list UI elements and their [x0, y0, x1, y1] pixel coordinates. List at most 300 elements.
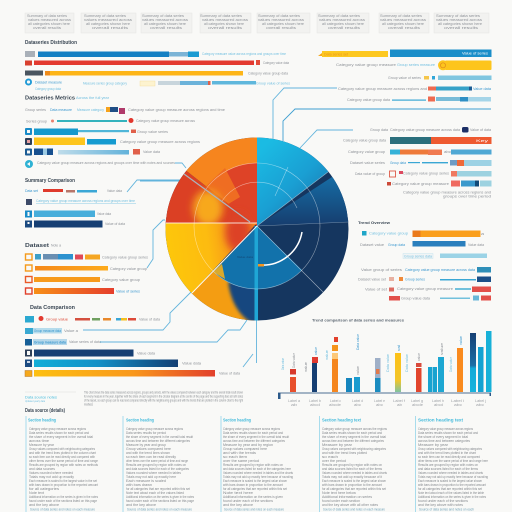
heading: Data Comparison — [30, 305, 75, 311]
upper left orange wedge — [186, 138, 257, 226]
orange cyan bar — [348, 150, 492, 155]
column body — [418, 427, 488, 512]
floating value labels: value — [440, 343, 444, 355]
card 5: Summary of data series — [258, 14, 300, 18]
column heading: Section heading text — [418, 418, 464, 422]
chip row: Category value group series — [102, 256, 148, 260]
card 5: values measured across — [258, 18, 304, 22]
teal bar row: Category value group measure across regions and — [338, 87, 427, 91]
column body: found under each of the sections listed on this page — [126, 499, 194, 503]
column body: found under each section — [322, 499, 360, 503]
column body: Source of data series and notes on each measure — [224, 508, 284, 512]
bar row: cyan bar — [25, 128, 168, 135]
row: Category value group series — [403, 172, 449, 176]
floating value labels: Data value — [292, 353, 296, 368]
floating value labels: value — [356, 366, 360, 375]
panel: column 5 — [415, 416, 488, 512]
row: Category value group measure across data — [405, 268, 475, 272]
column body: with bars drawn in proportion to the amount — [322, 483, 382, 487]
axis labels: Label g — [411, 399, 423, 403]
column body: the share of every segment in the overall total — [322, 435, 386, 439]
column body: Source of data series and notes on each measure — [30, 508, 95, 512]
card 8 — [434, 13, 489, 33]
chip row: Value data — [107, 189, 122, 193]
axis labels: abc — [454, 403, 462, 407]
column body: the share of every segment in the overall total result — [223, 435, 289, 439]
card 4 — [200, 13, 251, 33]
cyan red bar: Group data — [390, 161, 406, 165]
orange sliver — [205, 168, 240, 206]
orange cyan bar: abc — [444, 150, 451, 154]
multi bar — [343, 137, 492, 144]
label text: Across the full year — [76, 96, 110, 100]
column body: for all categories — [29, 487, 60, 491]
axis labels: abcd — [310, 403, 320, 407]
column body: and the key above — [126, 503, 156, 507]
axis labels: ab — [397, 403, 402, 407]
bar row: cyan bar: Group value series — [137, 130, 168, 134]
column body: so each item — [223, 455, 247, 459]
column body: Results are grouped by region with notes on — [126, 463, 186, 467]
left red band — [166, 170, 256, 226]
bottom left orange — [192, 243, 254, 320]
heading: Dataset — [25, 243, 49, 249]
column body: and data sources listed for each of the categories here — [223, 467, 291, 471]
yellow to red bar — [25, 370, 240, 376]
navy bar: Value data — [137, 352, 155, 356]
column body: Category value group measure across regions — [29, 427, 86, 431]
column body: Totals may not add up exactly because of it — [322, 475, 382, 479]
bar row: yellow: Category value group data — [248, 72, 288, 76]
yellow circle bar: Group series measure — [397, 63, 435, 67]
floating value labels: Data value — [356, 334, 360, 350]
pie chart — [166, 138, 349, 320]
column body: Category value group measure across regions — [223, 427, 280, 431]
column heading: Section heading — [126, 418, 154, 422]
column body: for all categories that are reported within this set — [322, 487, 386, 491]
gradient bar: Value of series — [116, 290, 140, 294]
card 1: Summary of data series — [27, 14, 67, 18]
heading: Summary Comparison — [25, 178, 75, 184]
navy base — [166, 138, 348, 320]
column body: Additional information on the series is given — [223, 495, 283, 499]
card 7: values measured across — [380, 18, 426, 22]
column body: other items over the same period of time and range — [126, 459, 188, 463]
intro paragraph: for every measure in the year, together with the share of each segment in the circular diagram at the centre of the page and the supporting bars at both sides — [84, 394, 243, 398]
column body: other items over the same period of time and range here — [418, 459, 488, 463]
axis labels: abcde — [329, 403, 341, 407]
blue label row: Value series of data — [69, 340, 101, 344]
intro paragraph: of the layout, so each group can be read and compared directly with the neighbouring groups and with the trends that are plotted in the column chart to the right — [84, 398, 243, 402]
column body: and data sources listed for each of the items — [322, 467, 382, 471]
column body: Each measure is scaled to the largest value in the set — [29, 479, 97, 483]
column body: and the key above with all other notes — [322, 503, 378, 507]
column body: for all categories that are reported within this set — [126, 487, 190, 491]
column body: Group values compared with neighbouring categories — [29, 447, 95, 451]
blue triangle — [214, 226, 302, 289]
orange bar: Category value group — [110, 267, 147, 271]
intro paragraph — [84, 390, 243, 406]
column body: and with the trends — [223, 451, 256, 455]
text row with navy chip: Value of data — [470, 128, 491, 132]
note text: Category value group measure across regions and — [403, 190, 491, 194]
panel: lower right bars — [358, 220, 491, 300]
upper left red inner — [226, 163, 257, 226]
column body: and the key above with notes — [418, 503, 463, 507]
bar row: chips: Data measure — [50, 108, 72, 112]
white arc — [259, 232, 302, 265]
card 7: overall results — [388, 26, 420, 30]
panel: footer intro — [25, 390, 243, 414]
column body: over the same period — [223, 459, 259, 463]
panel: lower left bars — [25, 305, 240, 376]
card 3 — [141, 13, 192, 33]
column body: Values rounded where needed in tables and the charts — [223, 471, 293, 475]
floating value labels: val — [397, 345, 401, 351]
column body: Totals may not add up exactly here because of rounding — [418, 475, 488, 479]
card 1: all categories shown here — [28, 22, 70, 26]
yellow to red bar: Value of data — [219, 372, 240, 376]
note text: groups over time period — [443, 194, 491, 198]
row — [361, 267, 491, 272]
column body: Additional information on series — [322, 495, 372, 499]
bar row: chips: Category value group measure across regions and time — [128, 108, 225, 112]
axis labels: abc — [476, 403, 484, 407]
column body: found under each of the sections — [223, 499, 273, 503]
yellow orange blob — [193, 190, 223, 226]
row — [355, 171, 492, 177]
axis labels: abcde — [412, 403, 423, 407]
bottom navy blob — [228, 280, 257, 325]
bar row: yellow bar — [25, 138, 200, 145]
bar row: teal line: Category value group measure across — [136, 119, 195, 123]
column body: Data series results for period — [126, 431, 166, 435]
column heading: Section heading — [223, 418, 251, 422]
chip row: Data set — [25, 189, 38, 193]
column body: Measure by year and by region — [223, 443, 273, 447]
card 6: all categories shown here — [322, 22, 364, 26]
floating value labels: value — [417, 353, 421, 361]
column body: Source of data series and notes on each measure — [323, 508, 385, 512]
cyan to navy bar — [25, 360, 201, 367]
column body: Data series results shown for each period and — [223, 431, 283, 435]
column body: Data series results shown for each period and — [418, 431, 478, 435]
bar row: chips: Group series — [25, 108, 46, 112]
column body: found under each of the sections — [418, 499, 468, 503]
axis labels: abc — [354, 403, 361, 407]
row: Dataset value set — [358, 278, 386, 282]
bar row: icon and light bars: Measure series group category — [83, 82, 127, 86]
column body: Data series results shown for each period and — [322, 431, 382, 435]
column body: Note text here — [223, 491, 253, 495]
upper right lower band — [258, 176, 348, 226]
bar row: round icon and note — [25, 160, 175, 168]
card 8: Summary of data series — [436, 14, 480, 18]
column body: Source of data series and notes on each measure — [127, 508, 192, 512]
teal bar row: Value data — [473, 87, 491, 91]
upper right cyan wedge — [257, 138, 328, 226]
chip row: Group value — [46, 318, 68, 322]
column body: Values rounded where needed — [29, 471, 73, 475]
orange bar row — [362, 230, 484, 237]
cyan red bar — [350, 160, 492, 166]
column body: with bars drawn — [126, 483, 152, 487]
row: Data value of group — [355, 172, 385, 176]
blue bar row: Dataset value — [360, 243, 384, 247]
column heading: Section heading — [28, 418, 56, 422]
column body: across time and between categories — [418, 439, 470, 443]
column body: and data sources listed for each of the categories — [126, 467, 189, 471]
panel: upper left bars — [25, 40, 290, 168]
diagonal spoke — [184, 174, 250, 222]
row — [387, 180, 492, 186]
bar row: icon and light bars: Dataset measure — [35, 80, 63, 84]
text row with navy chip — [370, 127, 491, 132]
orange cyan bar: Category value group — [348, 150, 385, 154]
blue label row — [25, 339, 101, 346]
axis labels: Label i — [451, 399, 464, 403]
heading: Dataseries Metrics — [25, 96, 75, 102]
column body: Totals may not add up exactly here — [126, 475, 176, 479]
rings and spokes — [166, 163, 349, 293]
panel: right mid bars — [343, 127, 492, 198]
card 6 — [317, 13, 369, 33]
column body: for all categories that are reported within this set — [418, 487, 482, 491]
boxed text row: Group series data — [404, 254, 432, 258]
panel: column 2 — [122, 416, 194, 512]
axis — [278, 392, 491, 399]
navy bar — [25, 350, 155, 356]
column body: Note text about each of the values listed in the table — [418, 491, 484, 495]
column body: so each item can be read directly and compared with — [29, 455, 95, 459]
bar row: yellow bar: Category value group measure across regions — [120, 140, 200, 144]
row: Value of set — [365, 288, 387, 292]
column body — [322, 427, 387, 512]
arc tip — [258, 264, 264, 266]
text row: Category value group measure across regions and groups over time — [36, 199, 135, 203]
column body: and with the trend lines plotted — [322, 451, 367, 455]
column body: Each measure is scaled — [126, 479, 166, 483]
blue bar row: Value data — [468, 243, 484, 247]
text row with navy chip: Category value group measure across data — [390, 128, 460, 132]
bar row: icon and light bars — [25, 78, 290, 91]
axis labels: Label h — [432, 399, 444, 403]
column body: Measure by year — [418, 443, 449, 447]
column body: and with the trend lines plotted in the column chart — [29, 451, 96, 455]
column body: Results are grouped by region with notes on — [223, 463, 283, 467]
yellow and blue header bar: Value of series — [462, 50, 488, 56]
axis labels — [288, 399, 486, 407]
column body: Each measure is scaled to the largest value shown — [322, 479, 386, 483]
column body: Note text here below — [322, 491, 357, 495]
axis labels: Label d — [352, 399, 363, 403]
yellow circle bar — [336, 60, 492, 70]
blue bar row — [360, 241, 484, 247]
column body: so each item can be read directly — [126, 455, 176, 459]
column body: with bars drawn in proportion to the reported amount — [29, 483, 98, 487]
floating value labels: value — [459, 336, 463, 345]
card 1: values measured across — [28, 18, 71, 22]
column body: Values rounded where needed in tables and charts — [418, 471, 483, 475]
chip row — [25, 316, 160, 322]
floating value labels: value — [314, 347, 318, 355]
column body: the share of every segment in the overall total — [29, 435, 93, 439]
column body: Totals may not add up exactly — [29, 475, 74, 479]
column body: Measure by year — [29, 443, 55, 447]
card 8: all categories shown here — [438, 22, 482, 26]
column body: across time and between the different categories — [322, 439, 384, 443]
axis labels: Label c — [330, 399, 341, 403]
footer intro label: Data source notes — [25, 396, 57, 400]
card 3: overall results — [150, 26, 182, 30]
card 6: overall results — [328, 26, 360, 30]
cyan to navy bar: Value data — [182, 362, 201, 366]
chip row: Value of data — [139, 318, 160, 322]
card 3: all categories shown here — [144, 22, 186, 26]
bar chart — [278, 318, 492, 407]
row — [365, 286, 491, 292]
light blue bar row — [388, 76, 492, 80]
card 7: all categories shown here — [382, 22, 424, 26]
card 2: Summary of data series — [84, 14, 126, 18]
yellow and blue header bar — [318, 50, 492, 57]
bar row: Value of data — [105, 222, 125, 226]
column body: the share of every segment in the overall total result — [126, 435, 193, 439]
card 7: Summary of data series — [380, 14, 422, 18]
card 7 — [379, 13, 429, 33]
label: Note a — [51, 244, 61, 248]
card 3: Summary of data series — [142, 14, 184, 18]
column body: Category value group measure across regions — [418, 427, 473, 431]
column body: Additional information on the series is given in the notes — [29, 495, 98, 499]
column body: Values rounded where needed in tables — [126, 471, 181, 475]
leader lines — [83, 88, 491, 367]
bar row: teal line — [26, 118, 195, 124]
column body: Totals may not add up exactly here because of rounding — [223, 475, 293, 479]
axis labels: Label f — [393, 399, 405, 403]
multi bar: Key — [476, 138, 488, 143]
bar row: icon and light bars: Category group data — [35, 87, 61, 91]
bar row: teal line: Series group — [26, 120, 47, 124]
red centre blob — [225, 212, 251, 252]
yellow and blue header bar: Data series set — [324, 52, 349, 56]
bar row: red: Category value data — [263, 61, 289, 65]
column body: so each — [322, 455, 338, 459]
cyan label row: Group measure data — [34, 329, 61, 333]
row: Value group of series — [361, 268, 402, 272]
panel: column 3 — [220, 416, 293, 512]
row: Category value group measure — [392, 182, 449, 186]
column body: Values rounded where needed in tables and charts — [322, 471, 387, 475]
axis labels: abc — [376, 403, 383, 407]
column body: Additional information on the series is given in the notes — [418, 495, 486, 499]
column body — [126, 427, 194, 512]
orange bar row: Category value group — [369, 232, 408, 236]
light blue bar row: Group value of series — [388, 76, 421, 80]
footer intro sublabel: Updated yearly data — [25, 400, 46, 403]
column body: Source of data series and notes on each — [419, 508, 474, 512]
card 1 — [25, 13, 74, 33]
column body: Group values compared with neighbouring categories — [322, 447, 386, 451]
heading: Dataseries Distribution — [25, 40, 77, 46]
floating value labels: value — [304, 362, 308, 372]
row: Group value data — [401, 296, 430, 300]
orange bar row: a — [481, 232, 484, 236]
card 6: Summary of data series — [318, 14, 360, 18]
orange bar: Category value group — [102, 278, 140, 282]
bar row: chips — [25, 107, 225, 114]
axis labels: abcd — [434, 403, 443, 407]
panel: upper right bars — [318, 50, 492, 102]
card 1: overall results — [33, 26, 61, 30]
chart title: Trend comparison of data series and measures — [312, 318, 405, 322]
column heading: Section heading text — [322, 418, 362, 422]
floating value labels: value — [325, 350, 329, 360]
column body: and the key above — [29, 503, 59, 507]
column body: and the key above — [223, 503, 253, 507]
bar row: round icon and note: Category value group measure across regions and groups over time with notes and sources — [37, 161, 175, 165]
column body: across time and between the different categories — [223, 439, 285, 443]
column body: Note text — [29, 491, 44, 495]
heading: Trend Overview — [358, 220, 391, 225]
floating value labels: Data value — [405, 354, 409, 372]
column body: Each measure is scaled to the largest value shown — [418, 479, 482, 483]
bar row: chips: Measure category — [77, 108, 104, 112]
note text — [403, 190, 491, 198]
axis labels: Label b — [309, 399, 321, 403]
column body — [29, 427, 98, 512]
cyan red bar: Dataset value series — [350, 161, 385, 165]
multi bar: Category value group data — [343, 138, 386, 142]
card 8: values measured across — [436, 18, 482, 22]
intro paragraph: notes — [84, 402, 93, 406]
axis labels: Label e — [374, 399, 385, 403]
bar row: red — [25, 60, 289, 66]
column body: Group values compared here — [223, 447, 267, 451]
blue label row: Group measure data — [34, 340, 67, 344]
card 2: all categories shown here — [86, 22, 130, 26]
axis labels: Label j — [475, 399, 486, 403]
intro paragraph: This chart shows the data series measured across regions, groups and periods, with the values compared between each category and the overall total result shown — [84, 390, 243, 394]
vertical cyan band — [254, 226, 258, 326]
chip row — [25, 189, 122, 193]
floating value labels: Data value — [281, 358, 285, 370]
column body: Category value group measure across regions — [126, 427, 183, 431]
blue bar row: Group data — [388, 243, 405, 247]
blue bar row — [347, 96, 491, 102]
floating value labels: Data value — [386, 354, 390, 372]
column body: across time — [29, 439, 49, 443]
bars — [290, 331, 492, 392]
column body: Results are grouped by region with notes on — [322, 463, 382, 467]
column body: with bars drawn in proportion to the amount — [223, 483, 283, 487]
panel: top summary cards — [25, 13, 489, 33]
column body: across time and between the different categories — [126, 439, 190, 443]
pie small label: Value data — [237, 255, 253, 259]
row: Group series — [405, 278, 425, 282]
column body — [223, 427, 293, 512]
bar row: navy and light bar: Value data — [143, 150, 160, 154]
cyan label row — [25, 328, 78, 334]
column body: so each item can be read directly and compared — [418, 455, 480, 459]
panel: column 4 — [319, 416, 387, 512]
column body: and data sources — [29, 467, 55, 471]
bar row: blue — [25, 51, 286, 57]
column body: over the period — [322, 459, 346, 463]
axis labels: Label a — [288, 399, 300, 403]
card 8: overall results — [444, 26, 478, 30]
bar row: Value data — [97, 212, 111, 216]
